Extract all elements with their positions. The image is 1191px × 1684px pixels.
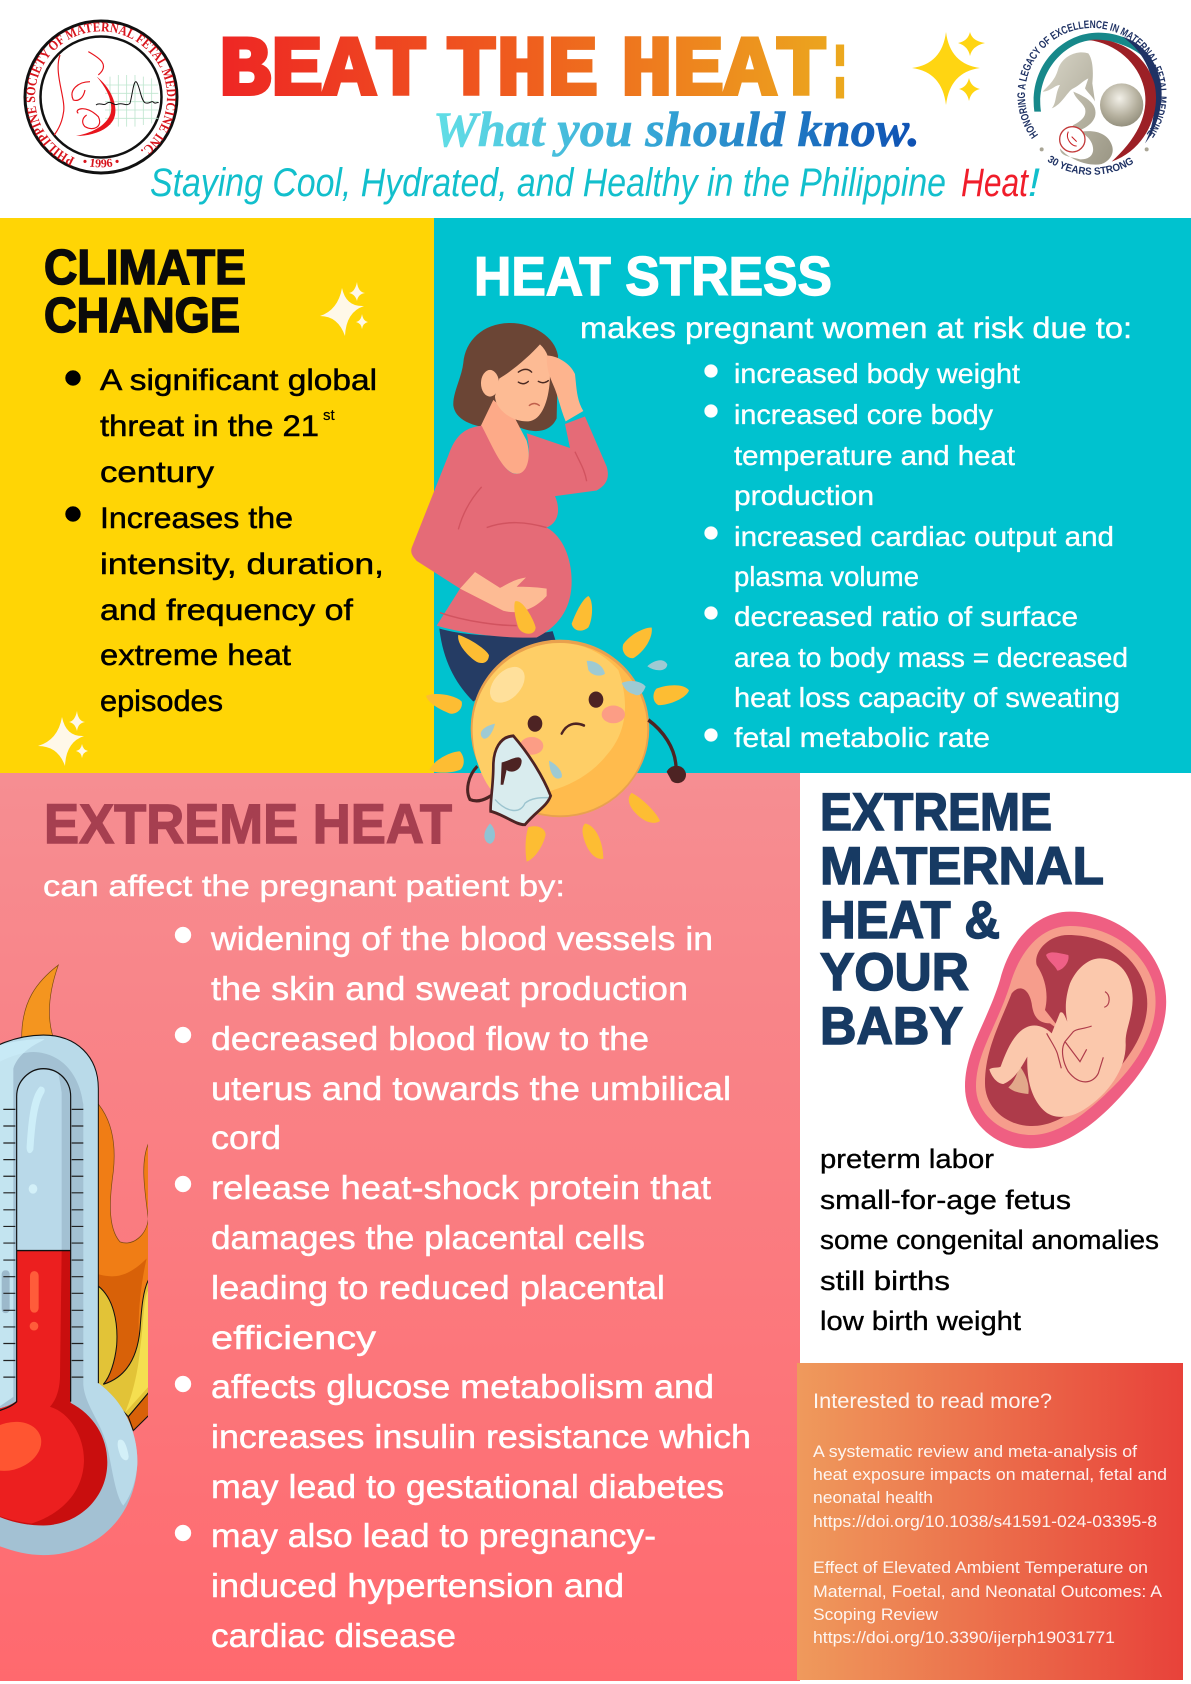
list: baby risks: still births: [820, 1266, 950, 1296]
heat stress bullets: increased cardiac output and: [734, 521, 1114, 552]
logo circular text: HONORING A LEGACY OF EXCELLENCE IN MATERNAL-FETAL MEDICINE: [1017, 20, 1167, 139]
list: baby risks: small-for-age fetus: [820, 1185, 1071, 1215]
icon: fetus in womb: [965, 912, 1166, 1148]
references list: Scoping Review: [813, 1605, 939, 1624]
references list: https://doi.org/10.1038/s41591-024-03395-8: [813, 1512, 1157, 1531]
logo ring arcs: [1034, 33, 1162, 165]
extreme heat bullets: efficiency: [211, 1319, 377, 1356]
extreme heat bullets: cardiac disease: [211, 1617, 456, 1654]
heading: extreme maternal heat and your baby: EXTREME: [820, 783, 1052, 842]
heat stress bullets: temperature and heat: [734, 440, 1015, 471]
red column and bulb: [0, 1251, 107, 1525]
references list: https://doi.org/10.3390/ijerph19031771: [813, 1628, 1115, 1647]
climate change bullets: [66, 364, 384, 718]
list: baby risks: low birth weight: [820, 1306, 1022, 1336]
header: tagline: Heat: [961, 161, 1029, 205]
heat stress bullets: increased core body: [734, 399, 993, 430]
climate change bullets: extreme heat: [100, 639, 292, 672]
climate change bullets: st: [323, 407, 336, 424]
heat stress bullets: production: [734, 480, 874, 511]
header: title: HEAT: [621, 25, 827, 120]
heat stress intro: makes pregnant women at risk due to:: [580, 312, 1132, 345]
panel: references: [797, 1363, 1183, 1680]
logo bottom text: 30 YEARS STRONG: [1048, 156, 1133, 175]
extreme heat bullets: may also lead to pregnancy-: [211, 1517, 656, 1554]
list: baby risks: preterm labor: [820, 1144, 994, 1174]
heading: extreme maternal heat and your baby: YOUR: [820, 943, 969, 1002]
panel: extreme maternal heat and your baby: [800, 773, 1191, 1363]
climate change bullets: century: [100, 456, 214, 489]
extreme heat bullets: leading to reduced placental: [211, 1269, 665, 1306]
extreme heat bullets: may lead to gestational diabetes: [211, 1468, 724, 1505]
extreme heat bullets: widening of the blood vessels in: [210, 920, 713, 957]
extreme heat bullets: the skin and sweat production: [211, 970, 688, 1007]
icon: gold sparkle: [912, 32, 985, 105]
climate change bullets: threat in the 21: [100, 410, 319, 443]
tube: [17, 1070, 62, 1250]
references list: [813, 1442, 1167, 1647]
references list: heat exposure impacts on maternal, fetal and: [813, 1465, 1167, 1484]
illustration: pregnant woman: [411, 323, 608, 701]
heading: extreme maternal heat and your baby: MATERNAL: [820, 837, 1104, 896]
climate change bullets: A significant global: [100, 364, 377, 397]
heat stress bullets: decreased ratio of surface: [734, 601, 1078, 632]
climate change bullets: and frequency of: [100, 594, 354, 627]
flames: [21, 964, 148, 1432]
header: subtitle: What you should know.: [433, 101, 920, 157]
heading: climate change: [44, 241, 246, 343]
references list: Maternal, Foetal, and Neonatal Outcomes: A: [813, 1582, 1163, 1601]
icon: sparkle bottom: [38, 711, 88, 766]
extreme heat bullets: cord: [211, 1119, 281, 1156]
logo year text: • 1996 •: [83, 158, 119, 168]
panel: climate change: [0, 218, 434, 773]
heat stress bullets: fetal metabolic rate: [734, 722, 990, 753]
heading: extreme maternal heat and your baby: HEAT &: [820, 891, 1000, 950]
illustration: thermometer with flames: [0, 964, 148, 1556]
extreme heat bullets: release heat-shock protein that: [211, 1169, 711, 1206]
ticks: [3, 1109, 83, 1377]
heading: extreme maternal heat and your baby: BABY: [820, 997, 963, 1056]
heading: climate change: CHANGE: [44, 289, 240, 343]
extreme heat bullets: increases insulin resistance which: [211, 1418, 751, 1455]
header: tagline: Staying Cool, Hydrated, and Healthy in the Philippine: [150, 161, 946, 205]
heading: climate change: CLIMATE: [44, 241, 246, 295]
references list: neonatal health: [813, 1488, 933, 1507]
logo: 30 years strong: [1017, 20, 1167, 175]
extreme heat intro: can affect the pregnant patient by:: [43, 870, 565, 903]
heat stress bullets: plasma volume: [734, 561, 919, 592]
text: :: [830, 25, 850, 120]
glass: [0, 1035, 137, 1555]
list: baby risks: some congenital anomalies: [820, 1225, 1159, 1255]
heading: heat stress: HEAT STRESS: [474, 245, 832, 307]
heat stress bullets: increased body weight: [734, 358, 1020, 389]
header: tagline: !: [1028, 161, 1040, 205]
heat stress bullets: area to body mass = decreased: [734, 642, 1128, 673]
references heading: Interested to read more?: [813, 1390, 1052, 1413]
extreme heat bullets: induced hypertension and: [211, 1567, 624, 1604]
extreme heat bullets: [175, 920, 751, 1654]
extreme heat bullets: uterus and towards the umbilical: [211, 1070, 731, 1107]
logo emblem: [54, 52, 159, 136]
illustration: crying sun: [426, 596, 689, 862]
extreme heat bullets: damages the placental cells: [211, 1219, 645, 1256]
references list: A systematic review and meta-analysis of: [813, 1442, 1137, 1461]
panel: heat stress: [434, 218, 1191, 773]
icon: sparkle top: [320, 282, 368, 336]
climate change bullets: intensity, duration,: [100, 548, 384, 581]
header: title: THE: [446, 25, 598, 120]
logo: Philippine Society of Maternal Fetal Medicine: [24, 20, 178, 174]
logo circular text: PHILIPPINE SOCIETY OF MATERNAL FETAL MEDICINE INC.: [26, 22, 176, 166]
climate change bullets: Increases the: [100, 502, 293, 535]
sun rays: [426, 596, 689, 862]
panel: extreme heat: [0, 773, 800, 1681]
references list: Effect of Elevated Ambient Temperature on: [813, 1558, 1148, 1577]
heat stress bullets: heat loss capacity of sweating: [734, 682, 1120, 713]
heat stress bullets: [704, 358, 1128, 753]
header: title: [219, 25, 850, 120]
extreme heat bullets: affects glucose metabolism and: [211, 1368, 714, 1405]
list: baby risks: [820, 1144, 1159, 1336]
climate change bullets: episodes: [100, 685, 223, 718]
header: title: BEAT: [219, 25, 427, 120]
heading: extreme maternal heat and your baby: [820, 783, 1104, 1056]
heading: extreme heat: EXTREME HEAT: [44, 792, 452, 855]
extreme heat bullets: decreased blood flow to the: [211, 1020, 649, 1057]
